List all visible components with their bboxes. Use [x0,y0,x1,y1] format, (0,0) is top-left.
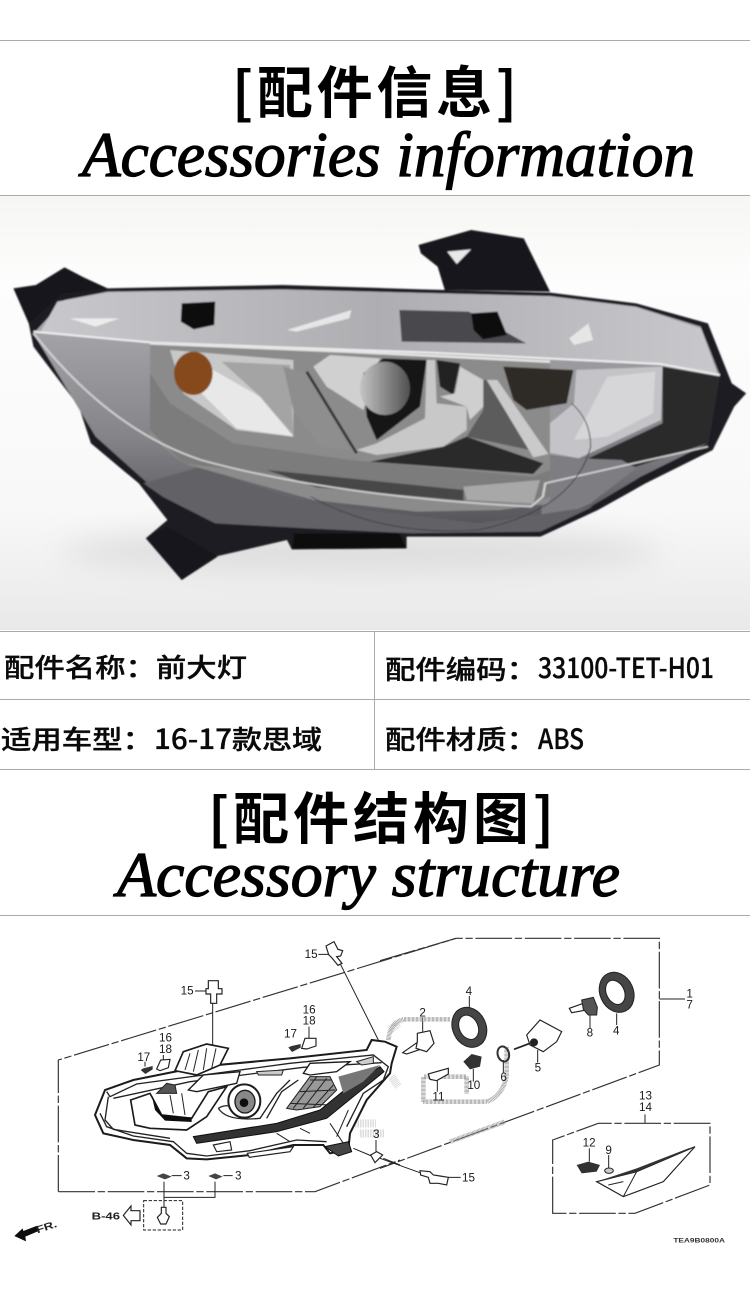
arrow: B-46 reference: B-46 [92,1211,121,1222]
part numbers left: 16 [303,1003,316,1016]
part numbers right: 14 [639,1101,652,1114]
part numbers right: 12 [583,1137,596,1150]
heading: accessories information [78,49,695,190]
part numbers left: 15 [181,985,194,998]
stippled harness [388,1019,507,1142]
bulb 2 [403,1031,434,1054]
part numbers left: 3 [235,1170,241,1183]
part numbers right: 10 [467,1079,481,1092]
table: accessory attributes: 配件名称 ：前大灯 [4,648,247,685]
part numbers right: 2 [419,1006,426,1019]
table: accessory attributes: 33100-TET-H01 [538,647,714,687]
arrow: front direction: FR. [35,1219,59,1236]
heading: accessories information: [配件信息] [232,49,517,130]
ballast 5 [514,1020,562,1052]
heading: accessories information: Accessories information [78,120,695,190]
heading: accessory structure [113,775,620,910]
diagram: exploded parts [14,938,726,1244]
table: accessory attributes: 款思域 [232,720,322,757]
part numbers right: 6 [500,1071,507,1084]
part numbers right: 15 [462,1172,475,1185]
part numbers right: 4 [613,1024,620,1037]
table: accessory attributes: ABS [538,718,584,758]
sub-assembly outline [553,1123,710,1213]
table: accessory attributes: 配件编码 ： [385,650,537,687]
part numbers right: 11 [432,1091,444,1104]
arrow: B-46 reference [92,1206,140,1225]
table: accessory attributes: 16-17 [154,718,232,758]
ring 6 [496,1045,511,1063]
part numbers left: 17 [137,1051,150,1064]
part numbers right [419,985,693,1185]
bulb 9 [605,1168,613,1173]
part numbers left: 18 [303,1014,316,1027]
photo detail: lamp chamber [150,343,573,512]
arrow: front direction [14,1219,59,1241]
part numbers right: 5 [535,1062,541,1075]
part numbers right: 7 [686,999,693,1012]
bulb 11 [428,1068,448,1081]
part numbers left: 18 [159,1043,172,1056]
table: accessory attributes: 适用车型 ： [1,720,153,757]
diagram: headlamp line art [95,1040,397,1159]
part numbers right: 13 [639,1090,652,1103]
part numbers left: 17 [284,1028,297,1041]
diagram: parts left [14,938,456,1241]
bolt 15 [420,1171,448,1185]
part numbers right: 9 [605,1144,612,1157]
part numbers left: 3 [183,1170,190,1183]
side marker lamp [597,1147,695,1197]
heading: accessory structure: Accessory structure [113,840,620,910]
diagram: parts right [380,938,726,1244]
table: accessory attributes: 配件材质 ： [385,720,537,757]
seal ring 4 lower [445,1002,493,1053]
photo: headlight [0,196,750,630]
part numbers left: 15 [305,948,318,961]
part numbers left [137,948,379,1183]
stippled area near lamp [333,1023,398,1133]
part numbers right: 4 [466,985,473,998]
part numbers left: 16 [159,1032,172,1045]
label: fasteners [141,942,400,1230]
part numbers right: 1 [686,987,693,1000]
seal ring 4 upper [593,967,641,1018]
part numbers left: 3 [373,1128,379,1141]
bulb 8 [569,997,597,1015]
bulb 12 [577,1162,600,1173]
heading: accessory structure: [配件结构图] [208,775,554,856]
table: accessory attributes [0,40,750,916]
bulb 10 [463,1054,482,1069]
part numbers right: 8 [587,1026,593,1039]
drawing code: TEA9B0800A [673,1238,726,1244]
